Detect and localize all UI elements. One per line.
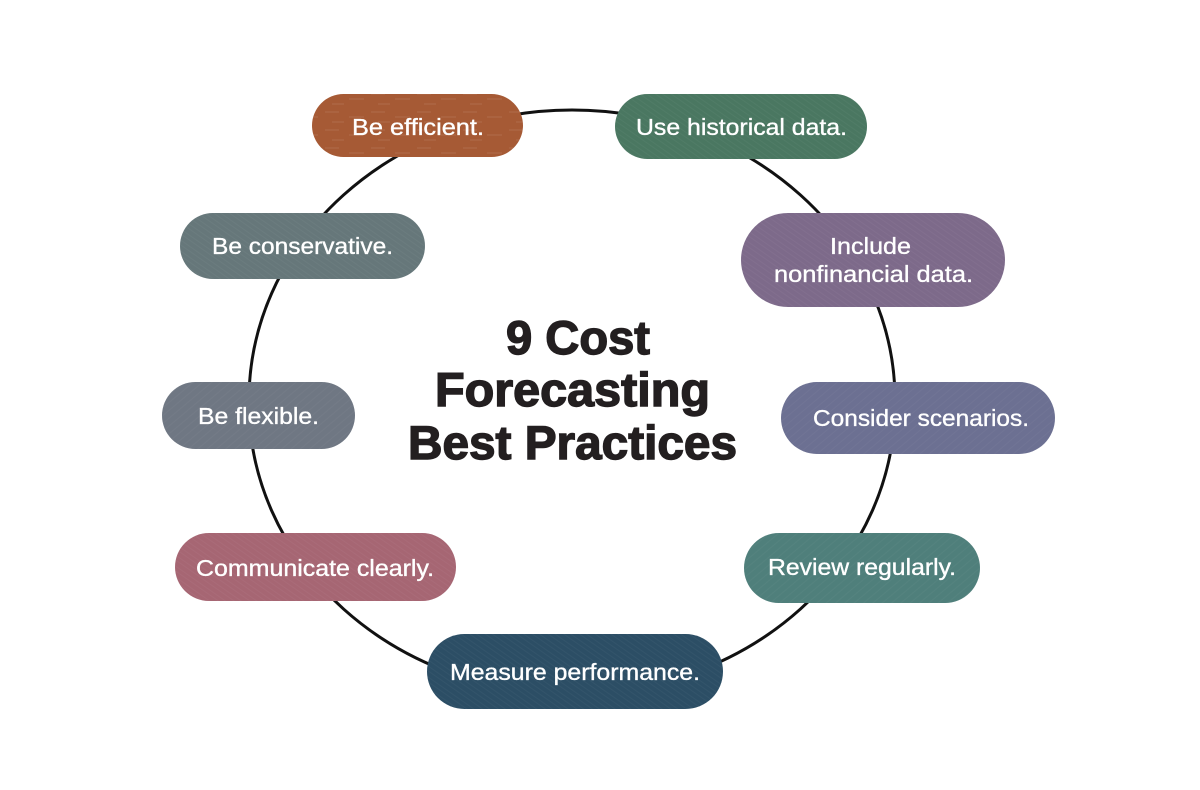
title: 9 Cost — [506, 311, 650, 364]
pill: Communicate clearly: Communicate clearly. — [196, 555, 434, 581]
title: Best Practices — [408, 416, 737, 469]
pill: Be conservative — [180, 213, 425, 279]
pill: Review regularly: Review regularly. — [768, 554, 956, 580]
pill: Include nonfinancial data: Include — [830, 233, 911, 259]
pill: Be flexible: Be flexible. — [198, 403, 319, 429]
pill: Include nonfinancial data — [741, 213, 1005, 307]
connecting ring — [249, 110, 895, 694]
title: Forecasting — [435, 363, 710, 416]
pill: Use historical data: Use historical data. — [636, 114, 847, 140]
title — [408, 311, 737, 469]
pill: Review regularly — [744, 533, 980, 603]
pill: Use historical data — [615, 94, 867, 159]
pill: Consider scenarios: Consider scenarios. — [813, 405, 1029, 431]
pill: Measure performance: Measure performance. — [450, 659, 700, 685]
pill: Communicate clearly — [175, 533, 456, 601]
pill: Be flexible — [162, 382, 355, 449]
pill: Be conservative: Be conservative. — [212, 233, 393, 259]
pill: Be efficient: Be efficient. — [352, 114, 484, 140]
pill: Consider scenarios — [781, 382, 1055, 454]
pill: Be efficient — [312, 94, 523, 157]
pill: Measure performance — [427, 634, 723, 709]
pill: Include nonfinancial data: nonfinancial data. — [774, 261, 973, 287]
